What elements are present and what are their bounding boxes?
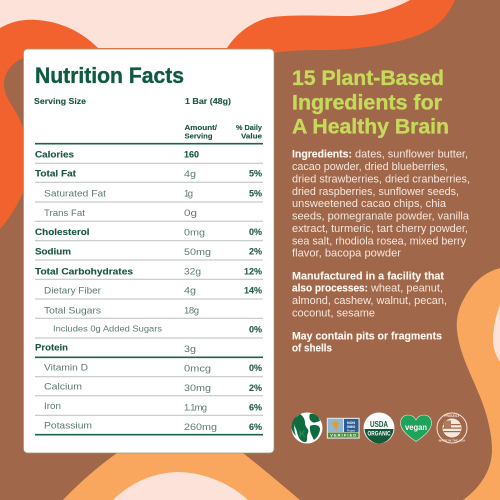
column headers: Value xyxy=(241,134,262,140)
row: calcium: 2% xyxy=(249,383,262,393)
row: potassium xyxy=(44,421,262,433)
icon: made in the usa seal: PROUDLY xyxy=(444,414,461,418)
icon: usda organic: ORGANIC xyxy=(368,432,391,438)
text block: ingredients: Ingredients: xyxy=(292,149,352,161)
row: calories xyxy=(35,149,199,159)
row: saturated fat: Saturated Fat xyxy=(44,189,107,199)
column headers: Serving xyxy=(184,134,212,140)
row: dietary fiber xyxy=(44,286,262,297)
row: vitamin d: 0% xyxy=(249,363,262,373)
column headers: Amount/ xyxy=(184,125,217,132)
icon: made in the usa seal xyxy=(437,413,467,443)
background: bottom pink arch xyxy=(113,472,248,500)
row: iron xyxy=(44,401,262,414)
nutrient table xyxy=(35,144,263,435)
row: potassium: 6% xyxy=(249,422,262,432)
serving size row xyxy=(34,96,231,106)
row: added sugars: 0% xyxy=(249,324,262,334)
row: saturated fat xyxy=(44,188,262,200)
row: trans fat xyxy=(44,208,197,219)
row: total sugars: 18g xyxy=(184,305,199,316)
row: dietary fiber: Dietary Fiber xyxy=(44,286,101,296)
row: dietary fiber: 14% xyxy=(244,286,262,296)
icon: vegan heart: vegan xyxy=(405,422,427,432)
text block: ingredients xyxy=(292,149,470,260)
row: dietary fiber: 4g xyxy=(184,286,196,297)
row: vitamin d: 0mcg xyxy=(184,364,211,374)
row: potassium: Potassium xyxy=(44,421,92,431)
column headers: % Daily xyxy=(236,125,262,132)
icon: non-gmo verified: Project xyxy=(347,428,355,432)
row: cholesterol: 0% xyxy=(249,227,262,237)
text block: pits warning xyxy=(292,330,442,355)
row: sodium: 2% xyxy=(249,246,262,256)
text block: facility allergens: Manufactured in a facility that xyxy=(292,270,444,282)
text block: ingredients: cacao powder, dried blueberries, xyxy=(292,161,448,173)
text block: ingredients: sea salt, rhodiola rosea, mixed berry xyxy=(292,236,467,248)
row: vitamin d: Vitamin D xyxy=(44,362,89,372)
text block: facility allergens: coconut, sesame xyxy=(292,307,375,319)
row: total fat: 5% xyxy=(249,169,262,179)
text block: facility allergens: almond, cashew, walnut, pecan, xyxy=(292,295,447,307)
row: total fat: Total Fat xyxy=(35,169,76,179)
icon: non-gmo verified: NON xyxy=(347,421,355,425)
text block: ingredients: dried strawberries, dried cranberries, xyxy=(292,173,470,185)
row: saturated fat: 1g xyxy=(184,189,193,200)
row: saturated fat: 5% xyxy=(249,188,262,198)
text block: ingredients: seeds, pomegranate powder, vanilla xyxy=(292,211,469,223)
text block: ingredients: unsweetened cacao chips, chia xyxy=(292,198,446,210)
background: right pink blob xyxy=(493,305,500,362)
icon: made in the usa seal: MADE IN THE USA xyxy=(439,438,466,442)
row: iron: 1.1mg xyxy=(184,402,207,414)
icon: vegan heart xyxy=(400,415,432,442)
row: total fat xyxy=(35,169,262,180)
text block: facility allergens xyxy=(292,270,447,319)
row: total carbohydrates xyxy=(35,266,262,278)
row: cholesterol xyxy=(35,227,262,238)
row: calcium: 30mg xyxy=(184,383,211,394)
row: protein xyxy=(35,343,196,355)
row: calories: 160 xyxy=(184,149,199,159)
icon: usda organic: USDA xyxy=(370,420,388,429)
row: iron: Iron xyxy=(44,401,61,411)
row: sodium xyxy=(35,246,262,258)
certification badges xyxy=(291,412,467,444)
row: trans fat: 0g xyxy=(184,208,197,219)
row: total carbohydrates: Total Carbohydrates xyxy=(35,266,133,276)
background: bottom peach arch xyxy=(63,453,300,500)
text block: ingredients: flavor, bacopa powder xyxy=(292,248,401,260)
row: calories: Calories xyxy=(35,149,74,159)
row: vitamin d xyxy=(44,362,262,374)
row: total sugars: Total Sugars xyxy=(44,305,102,315)
row: cholesterol: Cholesterol xyxy=(35,227,90,237)
text block: pits warning: May contain pits or fragments xyxy=(292,330,442,342)
text block: ingredients: extract, turmeric, tart cherry powder, xyxy=(292,223,468,235)
row: protein: Protein xyxy=(35,343,68,353)
text block: ingredients: dates, sunflower butter, xyxy=(355,149,468,161)
icon: kosher globe xyxy=(291,412,322,444)
row: total sugars xyxy=(44,305,199,316)
background: right peach blob xyxy=(457,268,500,500)
icon: non-gmo verified: VERIFIED xyxy=(330,433,356,438)
panel: nutrition facts card xyxy=(24,49,274,453)
row: potassium: 260mg xyxy=(184,422,217,433)
serving size row: Serving Size xyxy=(34,96,86,106)
text block: facility allergens: also processes: xyxy=(292,283,368,295)
row: protein: 3g xyxy=(184,344,196,355)
heading: 15 plant-based ingredients xyxy=(292,67,449,138)
heading: 15 plant-based ingredients: Ingredients for xyxy=(292,91,442,114)
row: sodium: 50mg xyxy=(184,247,211,258)
row: trans fat: Trans Fat xyxy=(44,208,86,218)
text block: pits warning: of shells xyxy=(292,343,332,355)
row: sodium: Sodium xyxy=(35,246,71,256)
text block: facility allergens: wheat, peanut, xyxy=(370,283,443,295)
icon: kosher globe: K xyxy=(299,429,306,439)
heading: 15 plant-based ingredients: A Healthy Brain xyxy=(292,115,449,138)
row: iron: 6% xyxy=(249,402,262,412)
row: calcium: Calcium xyxy=(44,382,82,392)
row: cholesterol: 0mg xyxy=(184,228,205,238)
heading: nutrition facts: Nutrition Facts xyxy=(35,63,184,88)
icon: non-gmo verified: GMO xyxy=(347,425,355,429)
row: added sugars xyxy=(53,324,262,334)
serving size row: 1 Bar (48g) xyxy=(185,96,231,106)
text block: ingredients: dried raspberries, sunflower seeds, xyxy=(292,186,459,198)
column headers xyxy=(184,125,262,140)
row: total fat: 4g xyxy=(184,169,196,180)
heading: 15 plant-based ingredients: 15 Plant-Based xyxy=(292,67,444,90)
row: calcium xyxy=(44,382,262,394)
row: total carbohydrates: 32g xyxy=(184,266,201,278)
background: orange wave xyxy=(0,0,500,240)
row: total carbohydrates: 12% xyxy=(244,266,262,276)
icon: non-gmo verified xyxy=(327,418,360,438)
icon: usda organic xyxy=(364,412,394,444)
row: added sugars: Includes 0g Added Sugars xyxy=(53,325,162,334)
